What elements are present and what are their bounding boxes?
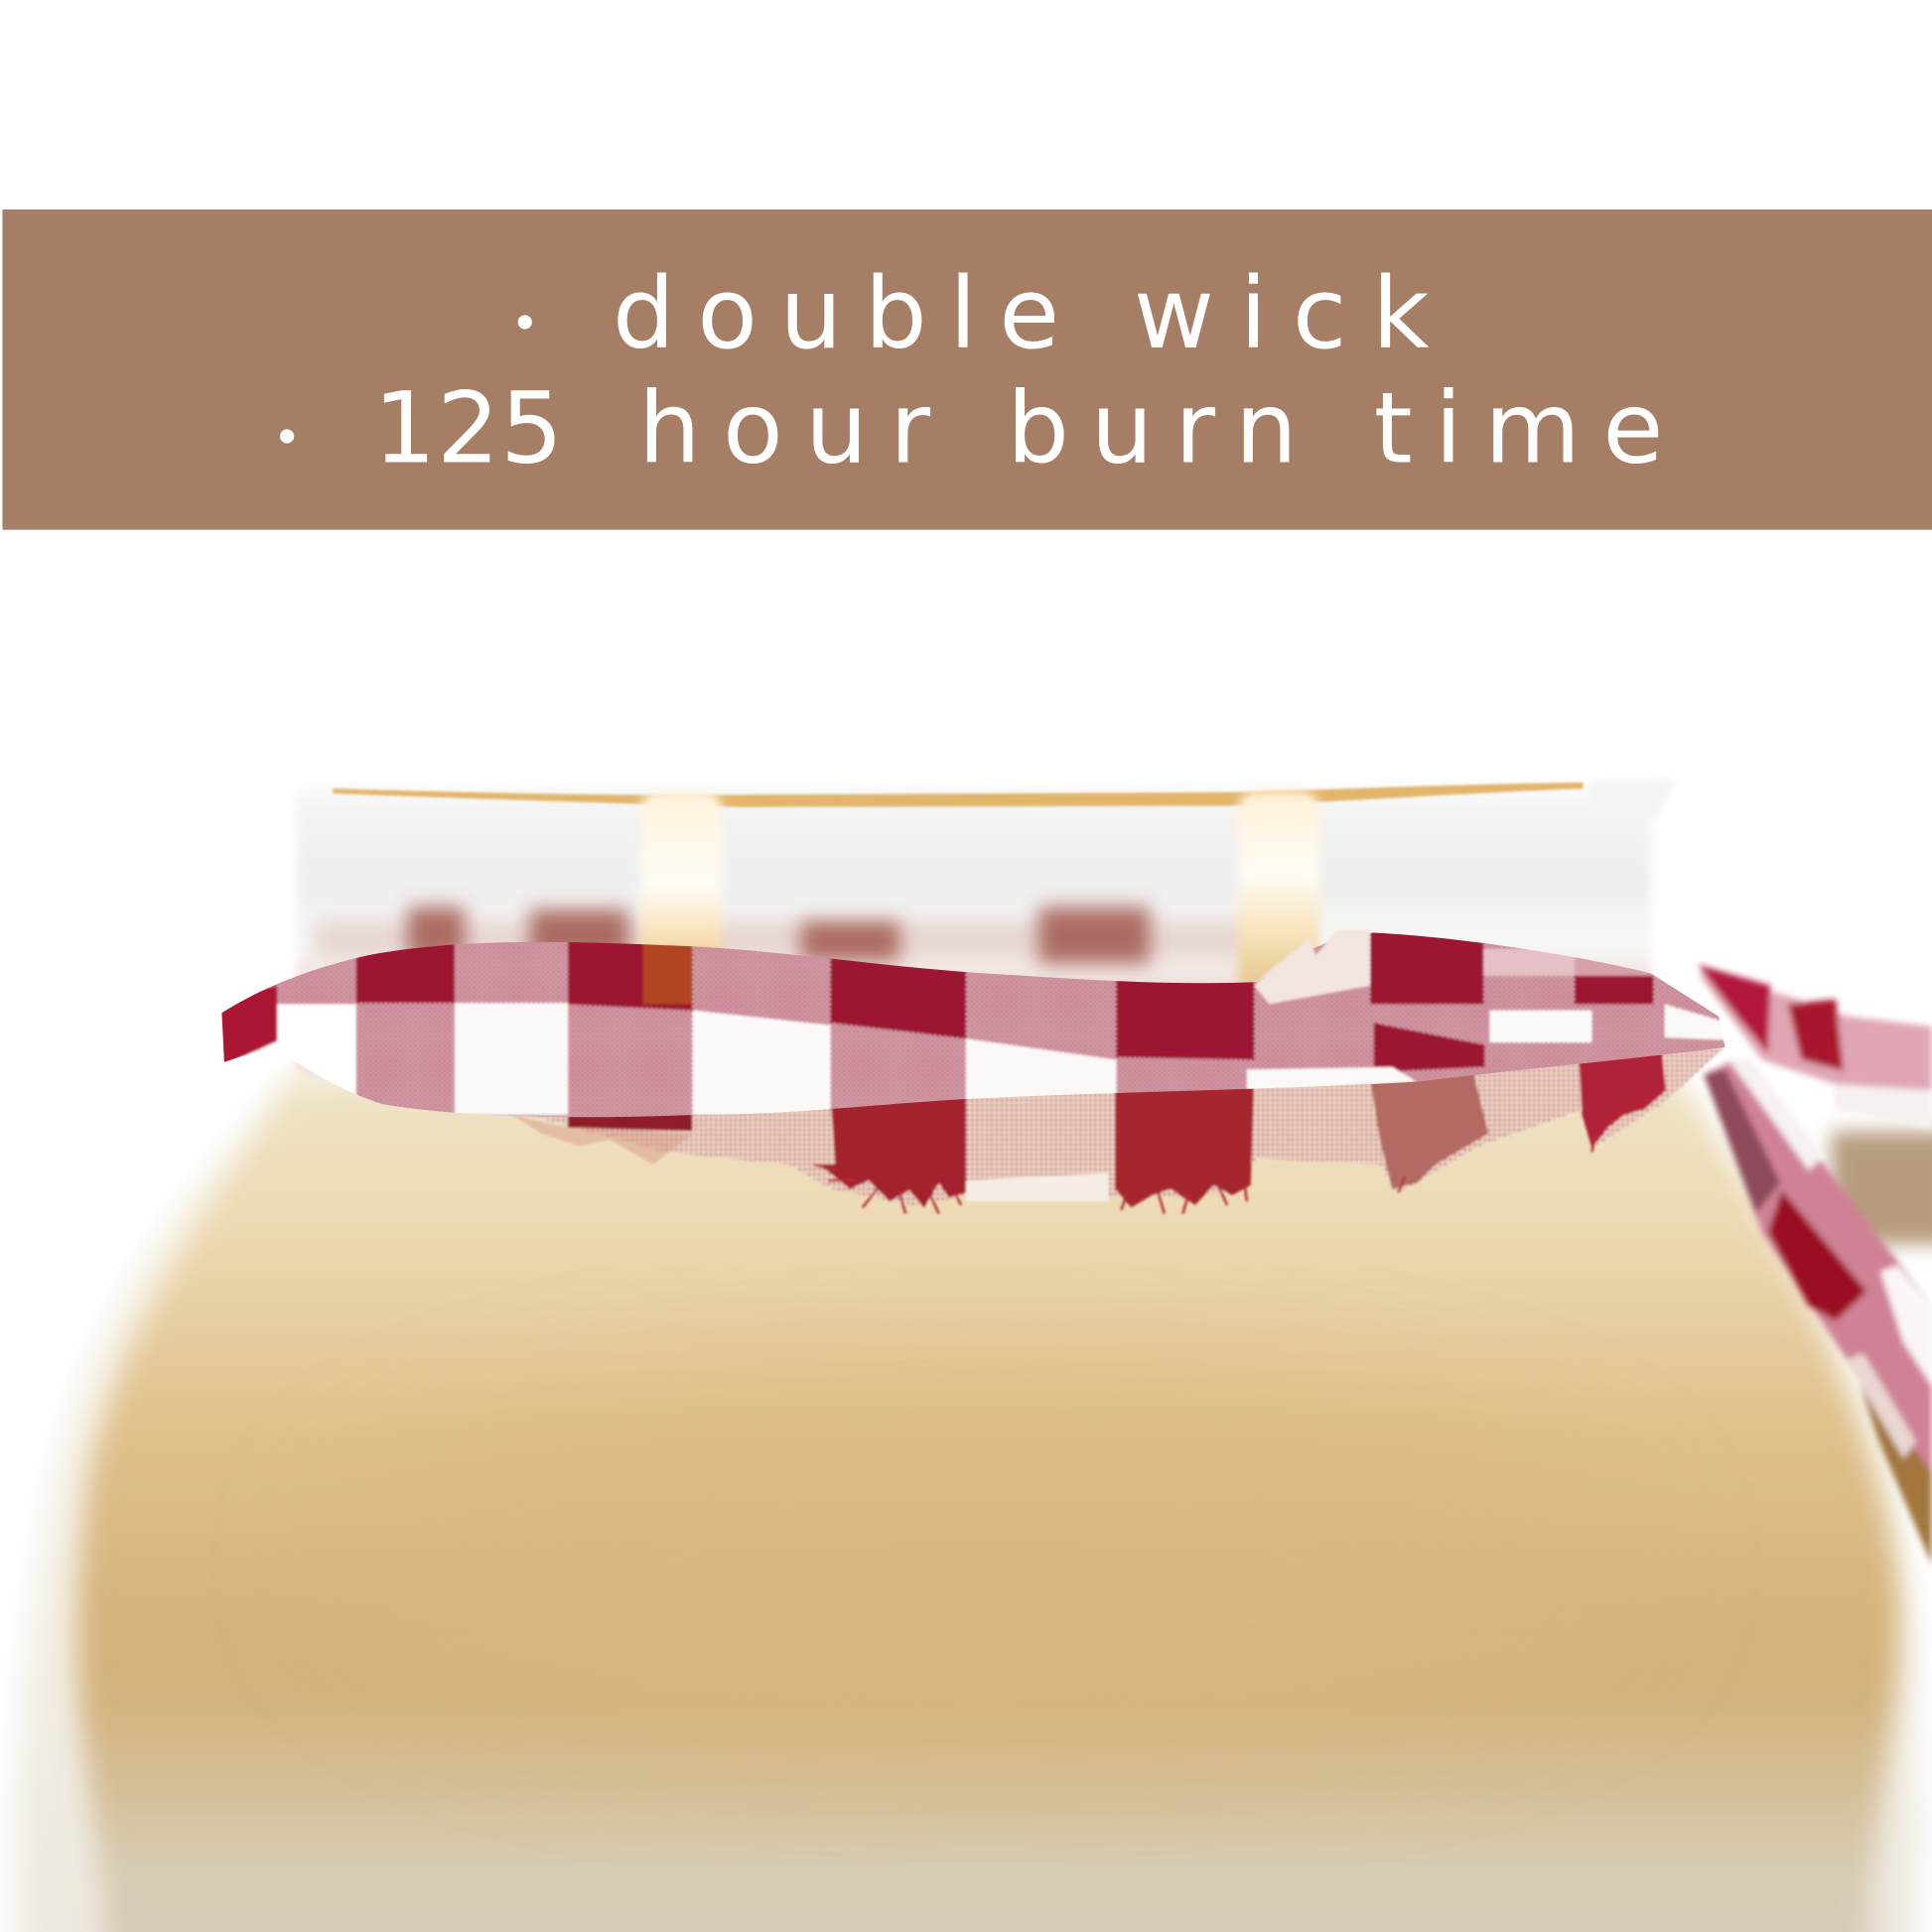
banner text line 2: burn	[1007, 371, 1298, 485]
tail: dark blob one	[1698, 965, 1770, 1053]
banner text line 2: time	[1374, 371, 1663, 485]
banner text line 1: double	[613, 257, 1059, 371]
jar: ribbon reflection band in glass	[314, 921, 1263, 959]
tail: white stripe	[1729, 1057, 1824, 1171]
ribbon: white end panel	[228, 1003, 357, 1095]
jar: glass neck	[296, 783, 1651, 1079]
tail: dark blob two	[1788, 1000, 1844, 1070]
ribbon: frayed lower layer	[511, 1041, 1725, 1213]
ribbon: lower pale woven band	[530, 1047, 1725, 1205]
flame: left	[640, 791, 722, 1001]
ribbon: faded column 3	[1370, 1069, 1488, 1189]
ribbon: left fringe	[511, 1115, 692, 1165]
banner background	[2, 209, 1932, 530]
ribbon: lower tail	[1704, 1057, 1932, 1565]
ribbon: upper fold	[222, 933, 1725, 1118]
jar: rim highlight	[1589, 778, 1676, 819]
candle jar	[17, 778, 1919, 1932]
ribbon: frayed white edge at the twist	[1254, 930, 1370, 1004]
jar: warm wax centre glow	[345, 1380, 1626, 1749]
jar: ribbon reflections in glass	[408, 906, 1150, 964]
banner text line 2: 125	[373, 371, 563, 485]
ribbon: white squares	[455, 1003, 1727, 1115]
banner text line 1: •	[516, 293, 534, 350]
ribbon: left shadow column	[568, 1109, 692, 1131]
jar: wax fill	[76, 1084, 1900, 1932]
banner text line 1: wick	[1134, 257, 1430, 371]
tail: golden glass edge	[1855, 1368, 1932, 1565]
banner text line 2	[278, 371, 1663, 485]
brown blurred label behind the jar	[1831, 1131, 1932, 1244]
tail: dark square	[1768, 1190, 1866, 1320]
ribbon: fringe threads	[813, 1134, 1595, 1213]
ribbon: woven base	[265, 933, 1725, 1118]
flame: right	[1238, 791, 1319, 995]
ribbon: dark squares upper row	[356, 924, 1654, 1072]
ribbon: dark tip	[222, 985, 279, 1062]
tail: pale stripe near jar	[1846, 1353, 1916, 1458]
ribbon: dark column 4	[1579, 1041, 1666, 1149]
tail: pale woven band	[1698, 973, 1932, 1090]
gingham ribbon	[209, 924, 1932, 1565]
ribbon: upper tail	[1698, 965, 1932, 1129]
tail: dark shade	[1704, 1069, 1780, 1213]
ribbon: frayed dark column 1	[819, 1084, 966, 1207]
jar: molten wax line on rim	[333, 782, 1584, 807]
jar: outer glass body	[17, 1072, 1919, 1932]
ribbon: flame glow through fabric	[643, 936, 692, 1004]
ribbon: frayed dark column 2	[1115, 1078, 1254, 1207]
ribbon: pale strip at the hem	[966, 1173, 1109, 1201]
tail: white square	[1880, 1266, 1932, 1386]
banner text line 1	[516, 257, 1430, 371]
ribbon: pale frayed top section	[1483, 949, 1654, 976]
tail: woven band	[1704, 1059, 1932, 1472]
banner text line 2: hour	[638, 371, 930, 485]
banner	[2, 209, 1932, 530]
tail: white bar	[1834, 1084, 1932, 1129]
banner text line 2: •	[278, 408, 296, 466]
